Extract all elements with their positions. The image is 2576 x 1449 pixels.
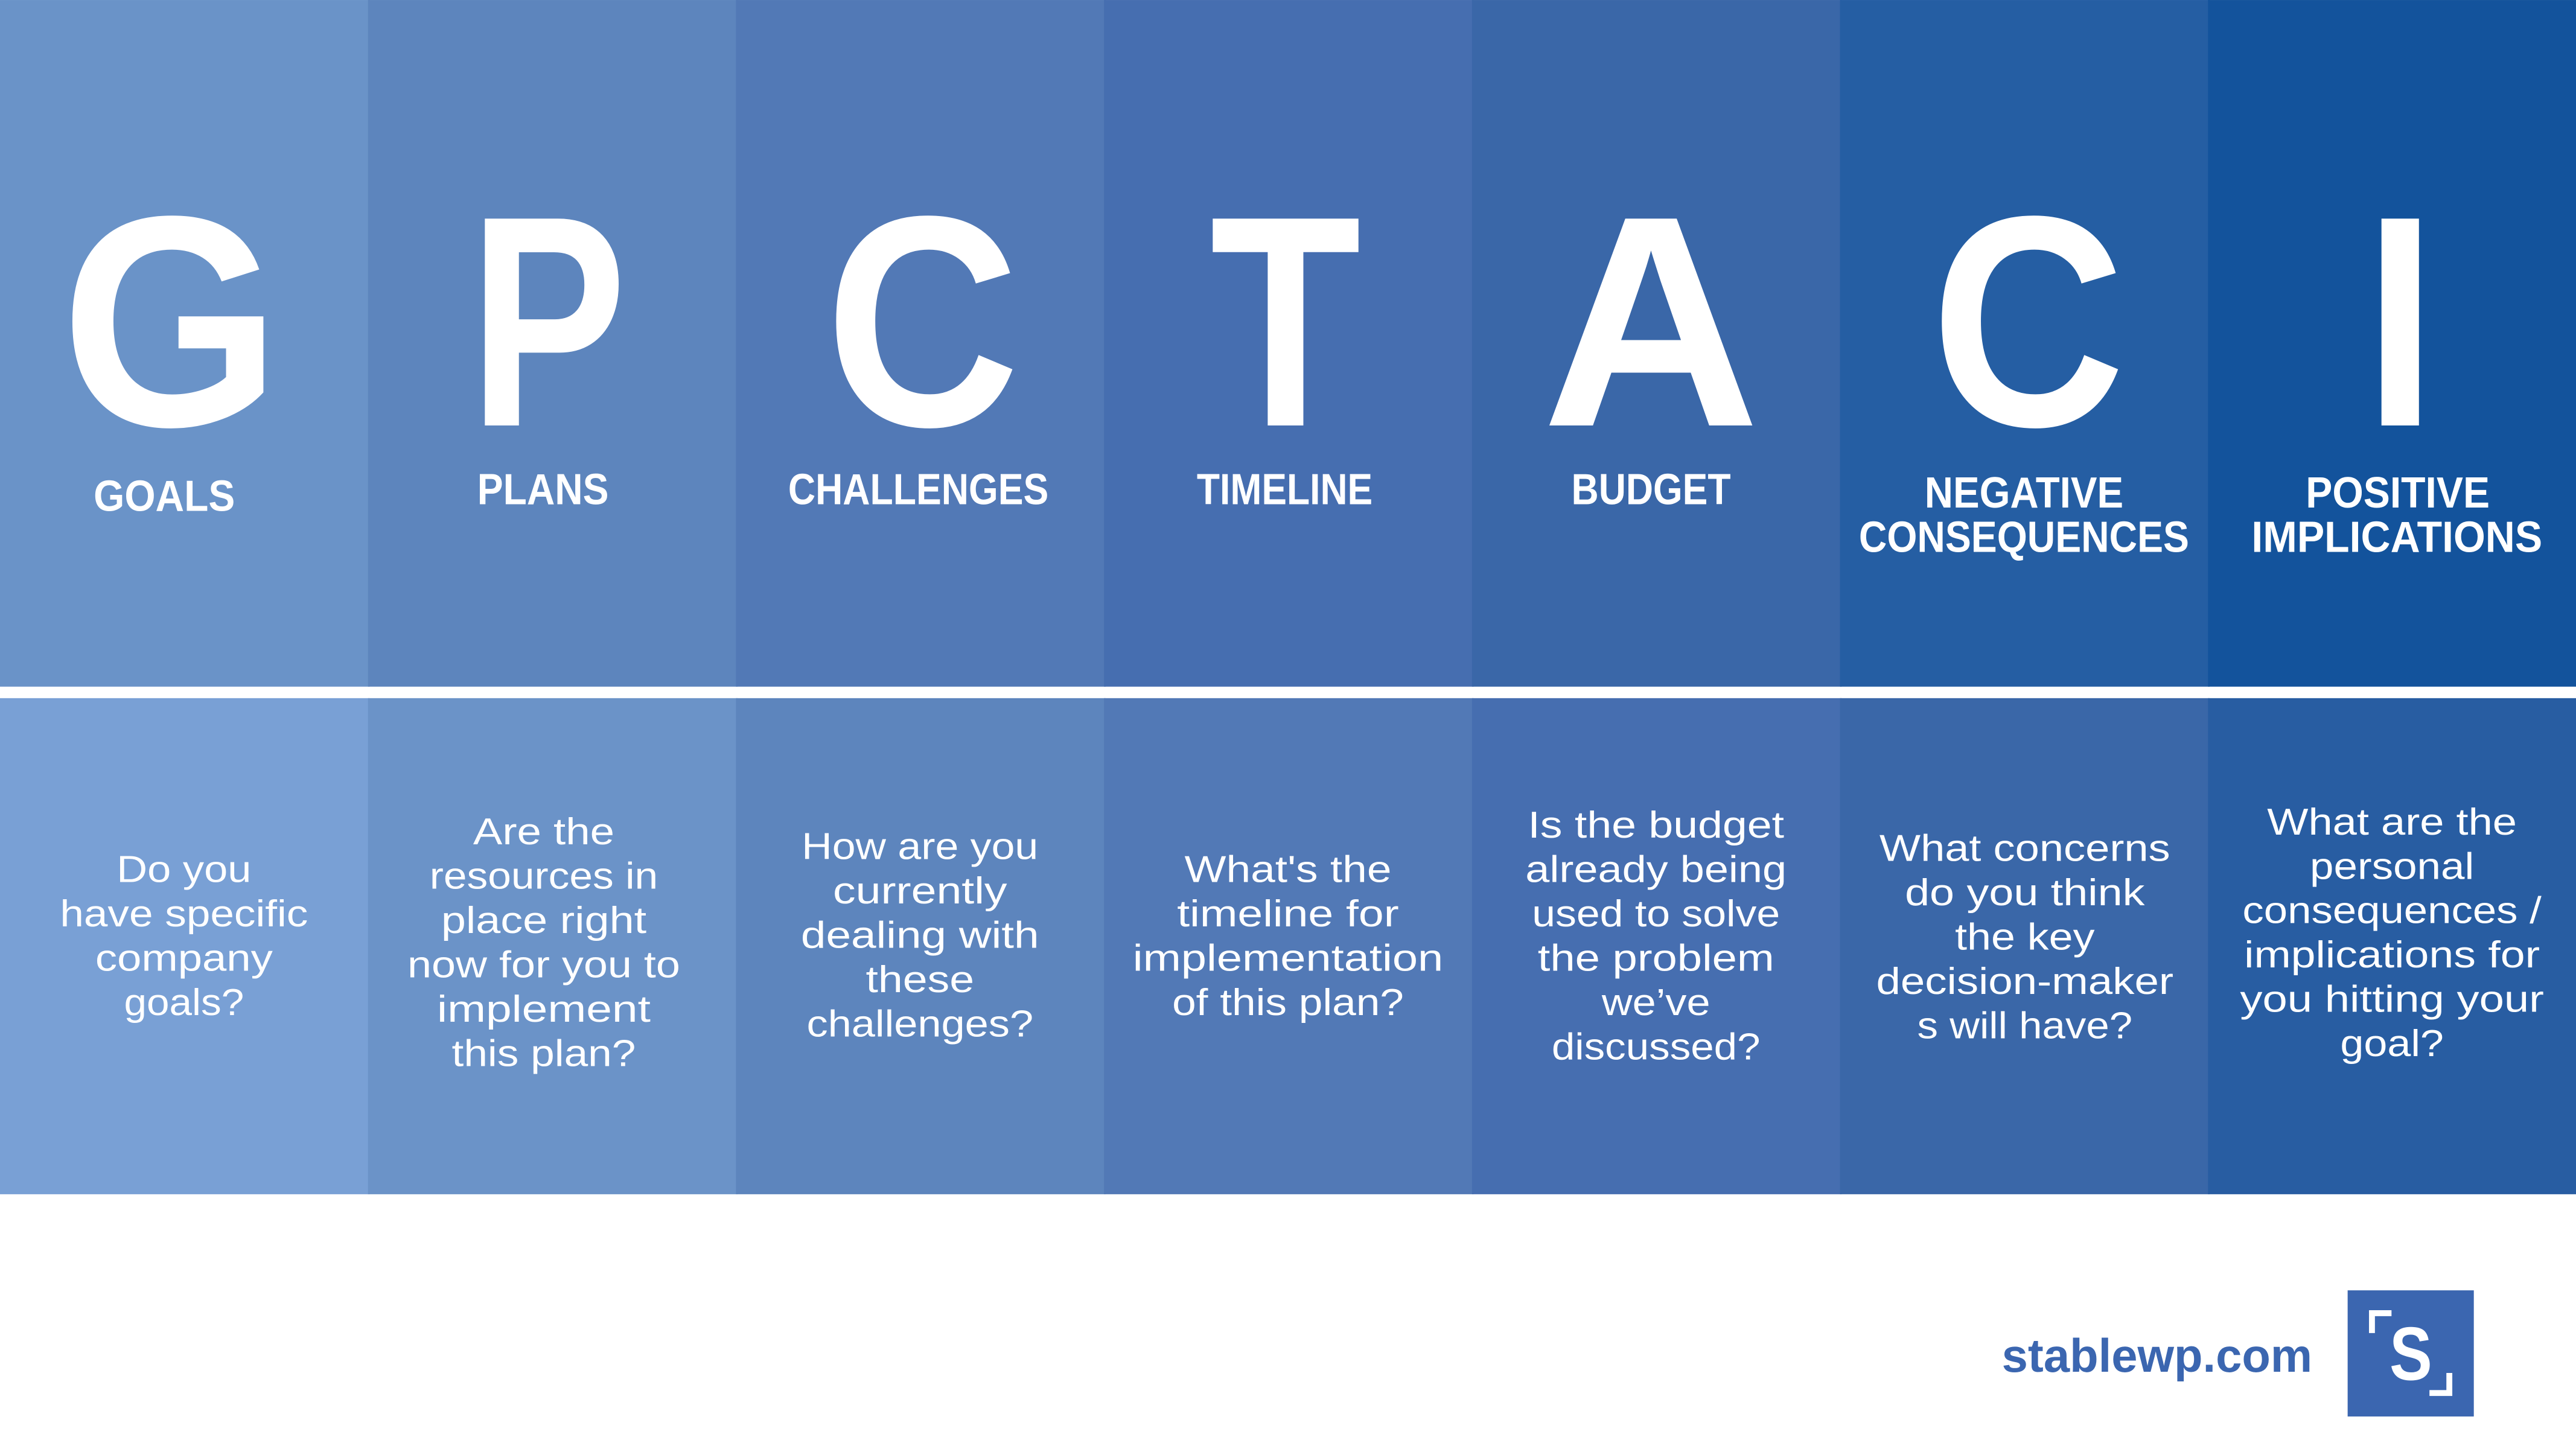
question: negative consequences: do you think [1905,871,2145,914]
question: negative consequences: the key [1955,916,2095,958]
question: challenges: challenges? [806,1003,1033,1045]
question panel: negative consequences [1840,698,2210,1194]
big letter P: P [469,153,626,489]
question: budget: already being [1525,849,1787,891]
question: positive implications: goal? [2340,1022,2444,1065]
header panel: plans [368,0,738,687]
question: plans: this plan? [452,1033,636,1075]
question: timeline: of this plan? [1172,981,1404,1024]
icon: stablewp logo [2348,1290,2474,1416]
column: positive implications [2208,0,2576,1194]
question: negative consequences [1876,827,2173,1046]
question: positive implications: What are the [2267,801,2517,843]
question panel: budget [1472,698,1841,1194]
column: budget [1472,0,1841,1194]
question: goals: have specific [60,893,308,935]
question: budget [1525,804,1787,1068]
question: timeline: implementation [1133,937,1443,979]
question: challenges [801,826,1039,1045]
label: negative consequences [1859,468,2189,562]
question: timeline [1133,849,1443,1024]
column: plans [368,0,738,1194]
question: positive implications [2240,801,2544,1065]
question panel: challenges [736,698,1106,1194]
question panel: timeline [1104,698,1474,1194]
label: negative consequences: NEGATIVE [1925,468,2123,517]
label: plans: PLANS [477,465,608,514]
question: budget: discussed? [1552,1026,1761,1068]
big letter G: G [61,153,281,489]
big letter C: C [1931,153,2126,489]
question panel: positive implications [2208,698,2576,1194]
question: positive implications: personal [2310,845,2474,887]
question: positive implications: you hitting your [2240,978,2544,1021]
header panel: positive implications [2208,0,2576,687]
question: plans: resources in [430,855,658,897]
question: budget: Is the budget [1528,804,1784,846]
label: timeline: TIMELINE [1197,465,1372,514]
column: negative consequences [1840,0,2210,1194]
brand name: stablewp.com [2002,1330,2312,1382]
question: goals: company [95,937,273,979]
label: positive implications: POSITIVE [2306,468,2490,517]
question panel: plans [368,698,738,1194]
label: budget: BUDGET [1572,465,1731,514]
label: challenges: CHALLENGES [788,465,1048,514]
question: goals: Do you [116,849,251,891]
question: plans: now for you to [407,944,680,986]
column: goals [0,0,369,1194]
question: budget: we’ve [1601,981,1710,1024]
header panel: challenges [736,0,1106,687]
column: timeline [1104,0,1474,1194]
question: goals: goals? [124,981,244,1024]
header panel: timeline [1104,0,1474,687]
label: positive implications [2251,468,2542,562]
label: goals: GOALS [94,472,235,521]
question: challenges: currently [833,870,1007,912]
big letter A: A [1542,153,1761,489]
question: challenges: these [866,958,974,1001]
question panel: goals [0,698,369,1194]
question: challenges: dealing with [801,914,1039,957]
question: plans: Are the [473,810,614,853]
question: negative consequences: decision-maker [1876,960,2173,1002]
question: plans [407,810,680,1075]
question: negative consequences: What concerns [1879,827,2170,869]
question: challenges: How are you [802,826,1038,868]
question: plans: implement [437,988,651,1030]
label: negative consequences: CONSEQUENCES [1859,513,2189,562]
header panel: budget [1472,0,1841,687]
big letter T: T [1210,153,1361,489]
question: negative consequences: s will have? [1918,1004,2132,1046]
question: budget: the problem [1538,937,1774,979]
big letter C: C [825,153,1020,489]
question: positive implications: implications for [2244,934,2540,976]
question: goals [60,849,308,1024]
question: timeline: timeline for [1177,893,1399,935]
label: positive implications: IMPLICATIONS [2251,513,2542,562]
question: plans: place right [441,899,646,941]
big letter I: I [2364,153,2437,489]
question: positive implications: consequences / [2242,890,2542,932]
question: timeline: What's the [1185,849,1391,891]
icon: stablewp logo: S [2389,1311,2432,1396]
header panel: goals [0,0,369,687]
column: challenges [736,0,1106,1194]
header panel: negative consequences [1840,0,2210,687]
question: budget: used to solve [1532,893,1780,935]
